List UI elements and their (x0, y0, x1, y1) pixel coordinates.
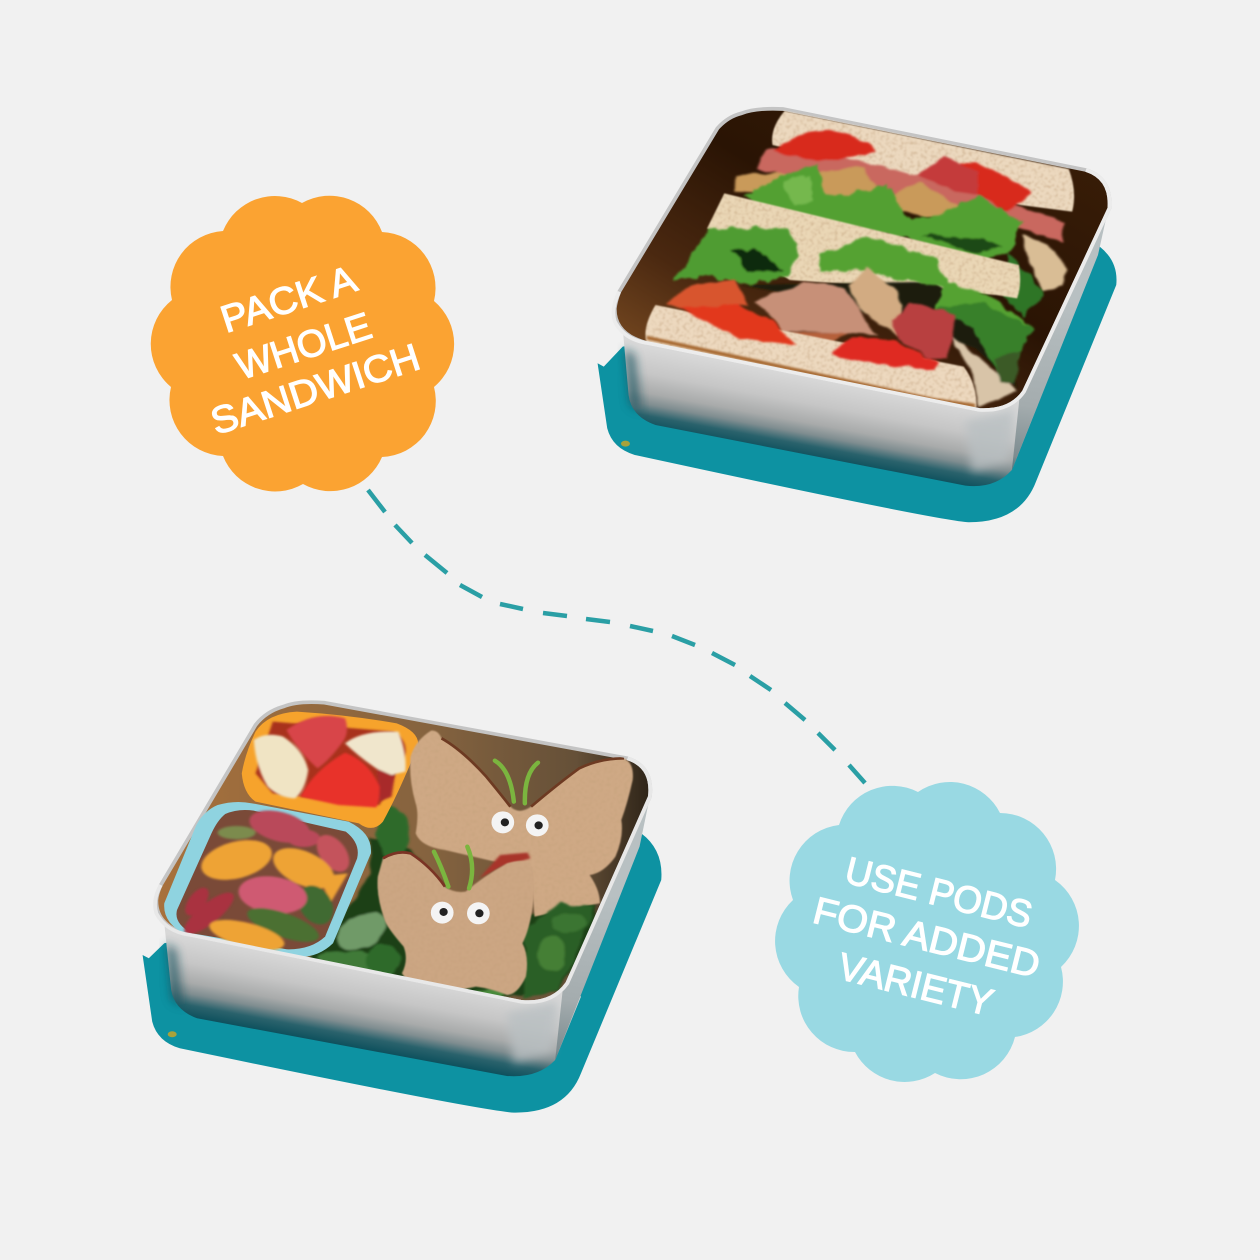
front bacon and tomato left (666, 280, 748, 310)
back meat (755, 148, 1064, 242)
dashed connector arrow (368, 490, 865, 783)
teal lid (143, 833, 661, 1113)
lunch food (164, 712, 633, 999)
front rim highlight (155, 758, 650, 1002)
blue pod (164, 802, 371, 957)
crackers (182, 809, 350, 951)
front bread (645, 305, 976, 408)
back butterfly filling (442, 738, 624, 807)
filling, dark gap (742, 282, 1017, 388)
back lettuce (745, 163, 1045, 318)
front meat (755, 282, 876, 335)
callout: pack a whole sandwich (151, 196, 454, 491)
strawberry top (287, 716, 347, 768)
callout text: blue badge (809, 850, 1044, 1025)
googly eyes (431, 811, 549, 924)
bacon right (893, 302, 955, 358)
strawberry red (376, 757, 397, 802)
crust (647, 338, 975, 406)
tin rim and interior (156, 702, 650, 1002)
front rim highlight (613, 170, 1110, 410)
callout text: blue badge: VARIETY (834, 946, 997, 1025)
pod interior (256, 722, 406, 805)
middle bread (707, 193, 1020, 298)
blue pod interior (176, 810, 358, 949)
callout text: blue badge: USE PODS (841, 850, 1036, 937)
antennae (434, 761, 538, 888)
callout text: blue badge: FOR ADDED (809, 890, 1044, 987)
lunch box with pods and butterfly sandwiches (143, 702, 661, 1113)
orange pod (242, 712, 418, 828)
back tomatoes (774, 131, 876, 162)
red filling (479, 853, 530, 878)
foreground greens (474, 903, 595, 999)
front butterfly filling (383, 852, 445, 887)
banana right (345, 731, 406, 775)
callout text: orange badge: PACK A (216, 258, 363, 342)
back butterfly sandwich (410, 731, 633, 917)
callout: use pods for added variety (775, 782, 1079, 1082)
steel tin (164, 797, 650, 1076)
tin rim and interior (615, 109, 1110, 410)
banana left (254, 735, 308, 798)
fruit (254, 716, 406, 807)
sandwich food (645, 111, 1074, 408)
strawberry front (300, 753, 380, 807)
teal lid (598, 247, 1117, 522)
right filling (948, 335, 1017, 407)
callout text: orange badge: WHOLE (231, 305, 377, 389)
chicken (735, 168, 965, 222)
greens (307, 807, 596, 998)
tomato right (831, 338, 938, 372)
back bread (772, 111, 1074, 212)
callout text: orange badge (206, 258, 425, 444)
mid lettuce (674, 228, 1033, 370)
callout text: orange badge: SANDWICH (206, 337, 425, 444)
steel tin (623, 208, 1108, 486)
front butterfly sandwich (378, 852, 534, 995)
lunch box with whole sandwich (598, 109, 1117, 522)
